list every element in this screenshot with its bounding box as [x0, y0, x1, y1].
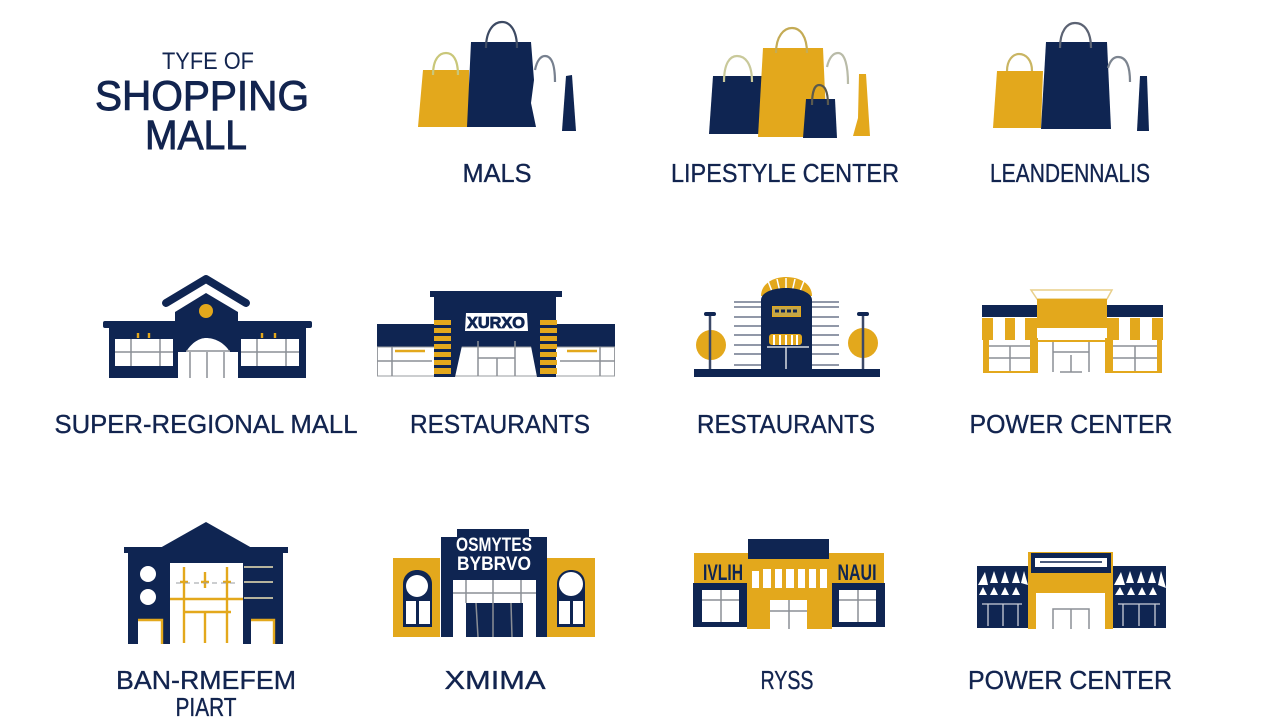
item: garbled label bags — [990, 23, 1150, 188]
label: XMIMA — [444, 665, 546, 695]
icon: building — [377, 291, 615, 377]
sign text: OSMYTES — [456, 535, 532, 556]
label: RYSS — [760, 665, 814, 695]
item: Restaurants (second) — [694, 277, 880, 439]
item: Restaurants (first) — [377, 291, 615, 439]
sign text: BYBRVO — [457, 554, 531, 575]
icon: building with trees — [694, 277, 880, 377]
item: Lifestyle Center — [671, 28, 899, 188]
icon: building — [982, 290, 1163, 373]
title: SHOPPING — [95, 72, 309, 119]
label: LEANDENNALIS — [990, 158, 1150, 188]
title: TYFE OF — [162, 48, 254, 75]
item: third row, first — [116, 522, 296, 720]
item: Power Center (top) — [970, 290, 1172, 439]
item: Xmima — [393, 529, 595, 695]
sign text: XURXO — [467, 315, 525, 332]
icon: shopping bags — [709, 28, 870, 138]
label — [116, 665, 296, 720]
icon: building with gable — [124, 522, 288, 644]
item: Super-Regional Mall — [54, 279, 358, 439]
sign text left: IVLIH — [703, 560, 743, 585]
sign text right: NAUI — [838, 560, 876, 585]
icon: building — [977, 552, 1166, 629]
icon: building with sign — [393, 529, 595, 637]
icon: shopping bags — [418, 22, 576, 131]
label: RESTAURANTS — [410, 409, 590, 439]
title: MALL — [145, 112, 247, 158]
item: Mals — [418, 22, 576, 188]
icon: building — [693, 539, 885, 629]
item: Ryss — [693, 539, 885, 695]
icon: shopping bags — [993, 23, 1149, 131]
label: SUPER-REGIONAL MALL — [54, 409, 358, 439]
label: POWER CENTER — [970, 409, 1172, 439]
label: LIPESTYLE CENTER — [671, 158, 899, 188]
icon: building — [103, 279, 312, 378]
label: MALS — [462, 158, 532, 188]
label: POWER CENTER — [968, 665, 1172, 695]
label: BAN-RMEFEM — [116, 665, 296, 695]
title — [95, 48, 309, 158]
item: Power Center (bottom) — [968, 552, 1172, 695]
label: RESTAURANTS — [697, 409, 875, 439]
sign text — [456, 535, 532, 575]
